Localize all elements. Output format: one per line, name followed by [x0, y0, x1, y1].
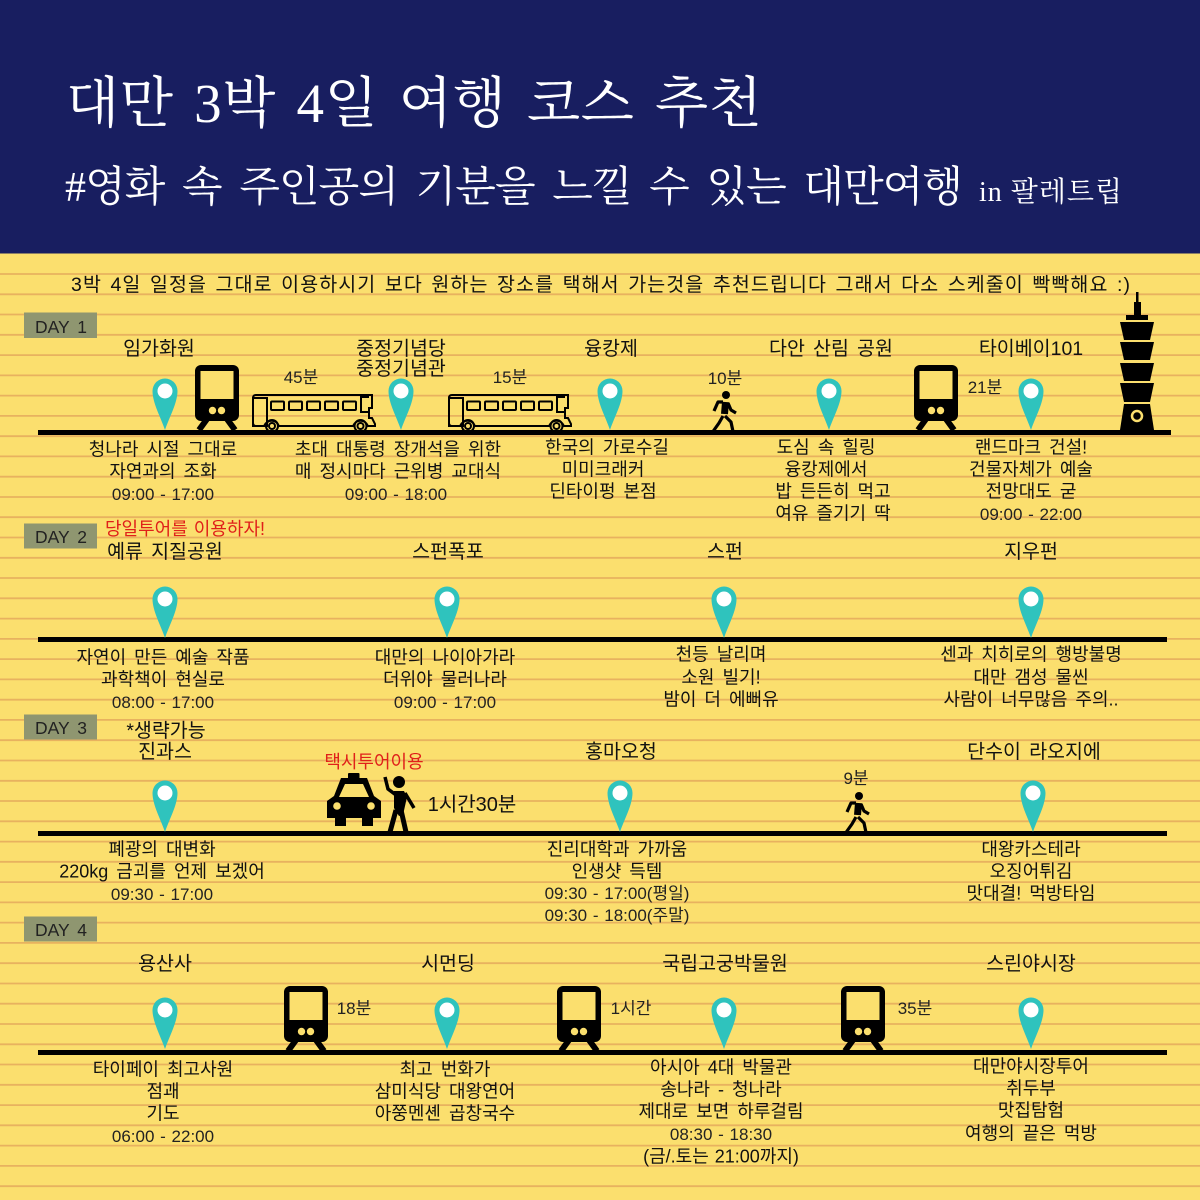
travel time: 15분: 15분: [493, 368, 527, 387]
stop: 지우펀: [940, 541, 1122, 710]
stop: 진과스: 09:30 - 17:00: [111, 885, 213, 904]
stop: 홍마오청: [545, 741, 689, 925]
icon: person hailing: [385, 776, 414, 832]
stop: 융캉제: 미미크래커: [562, 460, 644, 480]
stop: 타이베이101: 09:00 - 22:00: [980, 505, 1082, 524]
stop: 단수이 라오지에: 단수이 라오지에: [967, 741, 1101, 763]
stop: 단수이 라오지에: 맛대결! 먹방타임: [967, 884, 1095, 904]
stop: 홍마오청: 진리대학과 가까움: [547, 840, 687, 860]
travel time: 10분: 10분: [708, 369, 742, 388]
day 3 badge: DAY 3: [35, 718, 87, 738]
stop: 스펀: 소원 빌기!: [681, 668, 761, 688]
icon: bus: [449, 395, 571, 432]
stop: 시먼딩: [375, 953, 515, 1124]
day tour note: 당일투어를 이용하자!: [105, 519, 265, 539]
stop: 중정기념당: 중정기념관: [356, 358, 446, 380]
stop: 타이베이101: 전망대도 굳: [986, 482, 1076, 502]
stop: 용산사: 06:00 - 22:00: [112, 1127, 214, 1146]
icon: train: [841, 986, 885, 1051]
day 2 badge: DAY 2: [35, 527, 87, 547]
stop: 임가화원: 09:00 - 17:00: [112, 485, 214, 504]
icon: bus: [253, 395, 375, 432]
day 2 badge: [24, 524, 97, 548]
icon: train: [195, 365, 239, 430]
icon: taxi: [327, 773, 381, 826]
travel time: 21분: 21분: [968, 378, 1002, 397]
stop: 다안 산림 공원: 융캉제에서: [785, 460, 867, 480]
stop: 다안 산림 공원: [769, 338, 893, 524]
icon: Taipei 101 tower: [1120, 292, 1154, 430]
stop: 용산사: 타이페이 최고사원: [93, 1060, 233, 1080]
panel: day 4: [24, 916, 1167, 1166]
stop: 스린야시장: 맛집탐험: [998, 1100, 1064, 1120]
stop: 스펀: 스펀: [707, 541, 743, 563]
stop: 다안 산림 공원: 다안 산림 공원: [769, 338, 893, 360]
travel time: 18분: 18분: [337, 999, 371, 1018]
stop: 스린야시장: [965, 953, 1097, 1144]
stop: 진과스: [59, 720, 265, 904]
stop: 국립고궁박물원: 국립고궁박물원: [662, 953, 788, 975]
stop: 국립고궁박물원: 송나라 - 청나라: [660, 1080, 782, 1100]
stop: 예류 지질공원: 예류 지질공원: [107, 541, 223, 563]
stop: 시먼딩: 아쭝멘셴 곱창국수: [375, 1104, 515, 1124]
panel: day 2: [24, 519, 1167, 712]
stop: 단수이 라오지에: 대왕카스테라: [981, 840, 1081, 860]
stop: 홍마오청: 09:30 - 17:00(평일): [545, 884, 689, 903]
stop: 중정기념당: 초대 대통령 장개석을 위한: [295, 440, 501, 460]
day 3 timeline: [38, 831, 1167, 836]
subtitle: #영화 속 주인공의 기분을 느낄 수 있는 대만여행: [65, 164, 963, 211]
stop: 스펀폭포: [375, 541, 516, 712]
header panel: [0, 0, 1200, 254]
stop: 단수이 라오지에: 오징어튀김: [990, 862, 1072, 882]
stop: 진과스: 진과스: [138, 741, 192, 763]
stop: 스린야시장: 대만야시장투어: [973, 1056, 1089, 1076]
stop: 스펀폭포: 더위야 물러나라: [383, 670, 507, 690]
icon: walker: [846, 792, 869, 832]
stop: 국립고궁박물원: 제대로 보면 하루걸림: [638, 1102, 804, 1122]
day 3 badge: [24, 714, 97, 740]
stop: 임가화원: [89, 338, 237, 504]
stop: 지우펀: 센과 치히로의 행방불명: [940, 644, 1122, 664]
stop: 스펀: [663, 541, 779, 710]
stop: 융캉제: 융캉제: [584, 338, 638, 360]
stop: 지우펀: 지우펀: [1004, 541, 1058, 563]
stop: 용산사: 기도: [146, 1104, 180, 1124]
stop: 시먼딩: 시먼딩: [421, 953, 475, 975]
subtitle suffix: in 팔레트립: [979, 176, 1122, 208]
stop: 용산사: 용산사: [138, 953, 192, 975]
travel time: 9분: 9분: [843, 769, 869, 788]
stop: 다안 산림 공원: 도심 속 힐링: [777, 438, 875, 458]
icon: walker: [713, 391, 736, 432]
stop: 홍마오청: 홍마오청: [585, 741, 657, 763]
stop: 지우펀: 사람이 너무많음 주의..: [943, 690, 1119, 710]
stop: 임가화원: 임가화원: [123, 338, 195, 360]
stop: 국립고궁박물원: 08:30 - 18:30: [670, 1125, 772, 1144]
day 4 badge: [24, 916, 97, 942]
icon: train: [914, 365, 958, 430]
day 1 timeline: [38, 430, 1171, 435]
stop: 용산사: 점괘: [146, 1082, 180, 1102]
travel time: 1시간: 1시간: [611, 999, 652, 1018]
taxi tour note: 택시투어이용: [324, 752, 424, 772]
stop: 예류 지질공원: 08:00 - 17:00: [112, 693, 214, 712]
panel: day 3: [24, 714, 1167, 925]
intro note: 3박 4일 일정을 그대로 이용하시기 보다 원하는 장소를 택해서 가는것을 추천드립니다 그래서 다소 스케줄이 빡빡해요 :): [71, 274, 1130, 296]
stop: 스린야시장: 취두부: [1006, 1078, 1056, 1098]
travel time: 35분: 35분: [898, 999, 932, 1018]
stop: 융캉제: 한국의 가로수길: [545, 438, 669, 458]
stop: 스린야시장: 스린야시장: [986, 953, 1076, 975]
stop: 국립고궁박물원: [638, 953, 804, 1166]
travel time: 45분: 45분: [284, 368, 318, 387]
stop: 스펀폭포: 09:00 - 17:00: [394, 693, 496, 712]
stop: 예류 지질공원: [76, 541, 250, 712]
stop: 중정기념당: 중정기념당: [356, 338, 446, 360]
stop: 진과스: 폐광의 대변화: [108, 840, 216, 860]
stop: 타이베이101: 타이베이101: [979, 338, 1083, 360]
day 1 badge: [24, 312, 97, 338]
stop: 국립고궁박물원: 아시아 4대 박물관: [650, 1058, 792, 1078]
stop: 중정기념당: 09:00 - 18:00: [345, 485, 447, 504]
stop: 스펀: 천등 날리며: [676, 644, 766, 664]
stop: 진과스: 220kg 금괴를 언제 보겠어: [59, 862, 265, 882]
travel time: 1시간30분: 1시간30분: [428, 793, 516, 816]
title: 대만 3박 4일 여행 코스 추천: [66, 73, 762, 134]
stop: 용산사: [93, 953, 233, 1146]
stop: 융캉제: [545, 338, 669, 502]
stop: 스펀폭포: 대만의 나이아가라: [375, 648, 516, 668]
panel: day 1: [24, 292, 1171, 524]
stop: 국립고궁박물원: (금/.토는 21:00까지): [643, 1146, 799, 1166]
stop: 임가화원: 자연과의 조화: [109, 462, 217, 482]
stop: 시먼딩: 삼미식당 대왕연어: [375, 1082, 515, 1102]
stop: 스펀폭포: 스펀폭포: [412, 541, 484, 563]
stop: 홍마오청: 09:30 - 18:00(주말): [545, 906, 689, 925]
icon: train: [284, 986, 328, 1051]
stop: 중정기념당: [295, 338, 501, 504]
stop: 단수이 라오지에: [967, 741, 1101, 904]
stop: 지우펀: 대만 갬성 물씬: [973, 668, 1089, 688]
stop: 타이베이101: 랜드마크 건설!: [975, 438, 1087, 458]
stop: 스펀: 밤이 더 에뻐유: [663, 690, 779, 710]
day 2 timeline: [38, 637, 1167, 642]
stop: 예류 지질공원: 자연이 만든 예술 작품: [76, 648, 250, 668]
stop: 중정기념당: 매 정시마다 근위병 교대식: [295, 462, 501, 482]
stop: 다안 산림 공원: 밥 든든히 먹고: [775, 482, 891, 502]
stop: 타이베이101: 건물자체가 예술: [969, 460, 1093, 480]
day 1 badge: DAY 1: [35, 317, 87, 337]
stop: 시먼딩: 최고 번화가: [400, 1060, 490, 1080]
stop: 다안 산림 공원: 여유 즐기기 딱: [775, 504, 891, 524]
stop: 예류 지질공원: 과학책이 현실로: [101, 670, 225, 690]
stop: 진과스: *생략가능: [126, 720, 206, 742]
stop: 홍마오청: 인생샷 득템: [572, 862, 662, 882]
day 4 badge: DAY 4: [35, 920, 87, 940]
icon: train: [557, 986, 601, 1051]
stop: 타이베이101: [969, 338, 1093, 524]
stop: 임가화원: 청나라 시절 그대로: [89, 440, 237, 460]
stop: 스린야시장: 여행의 끝은 먹방: [965, 1124, 1097, 1144]
stop: 융캉제: 딘타이펑 본점: [549, 482, 657, 502]
day 4 timeline: [38, 1050, 1167, 1055]
